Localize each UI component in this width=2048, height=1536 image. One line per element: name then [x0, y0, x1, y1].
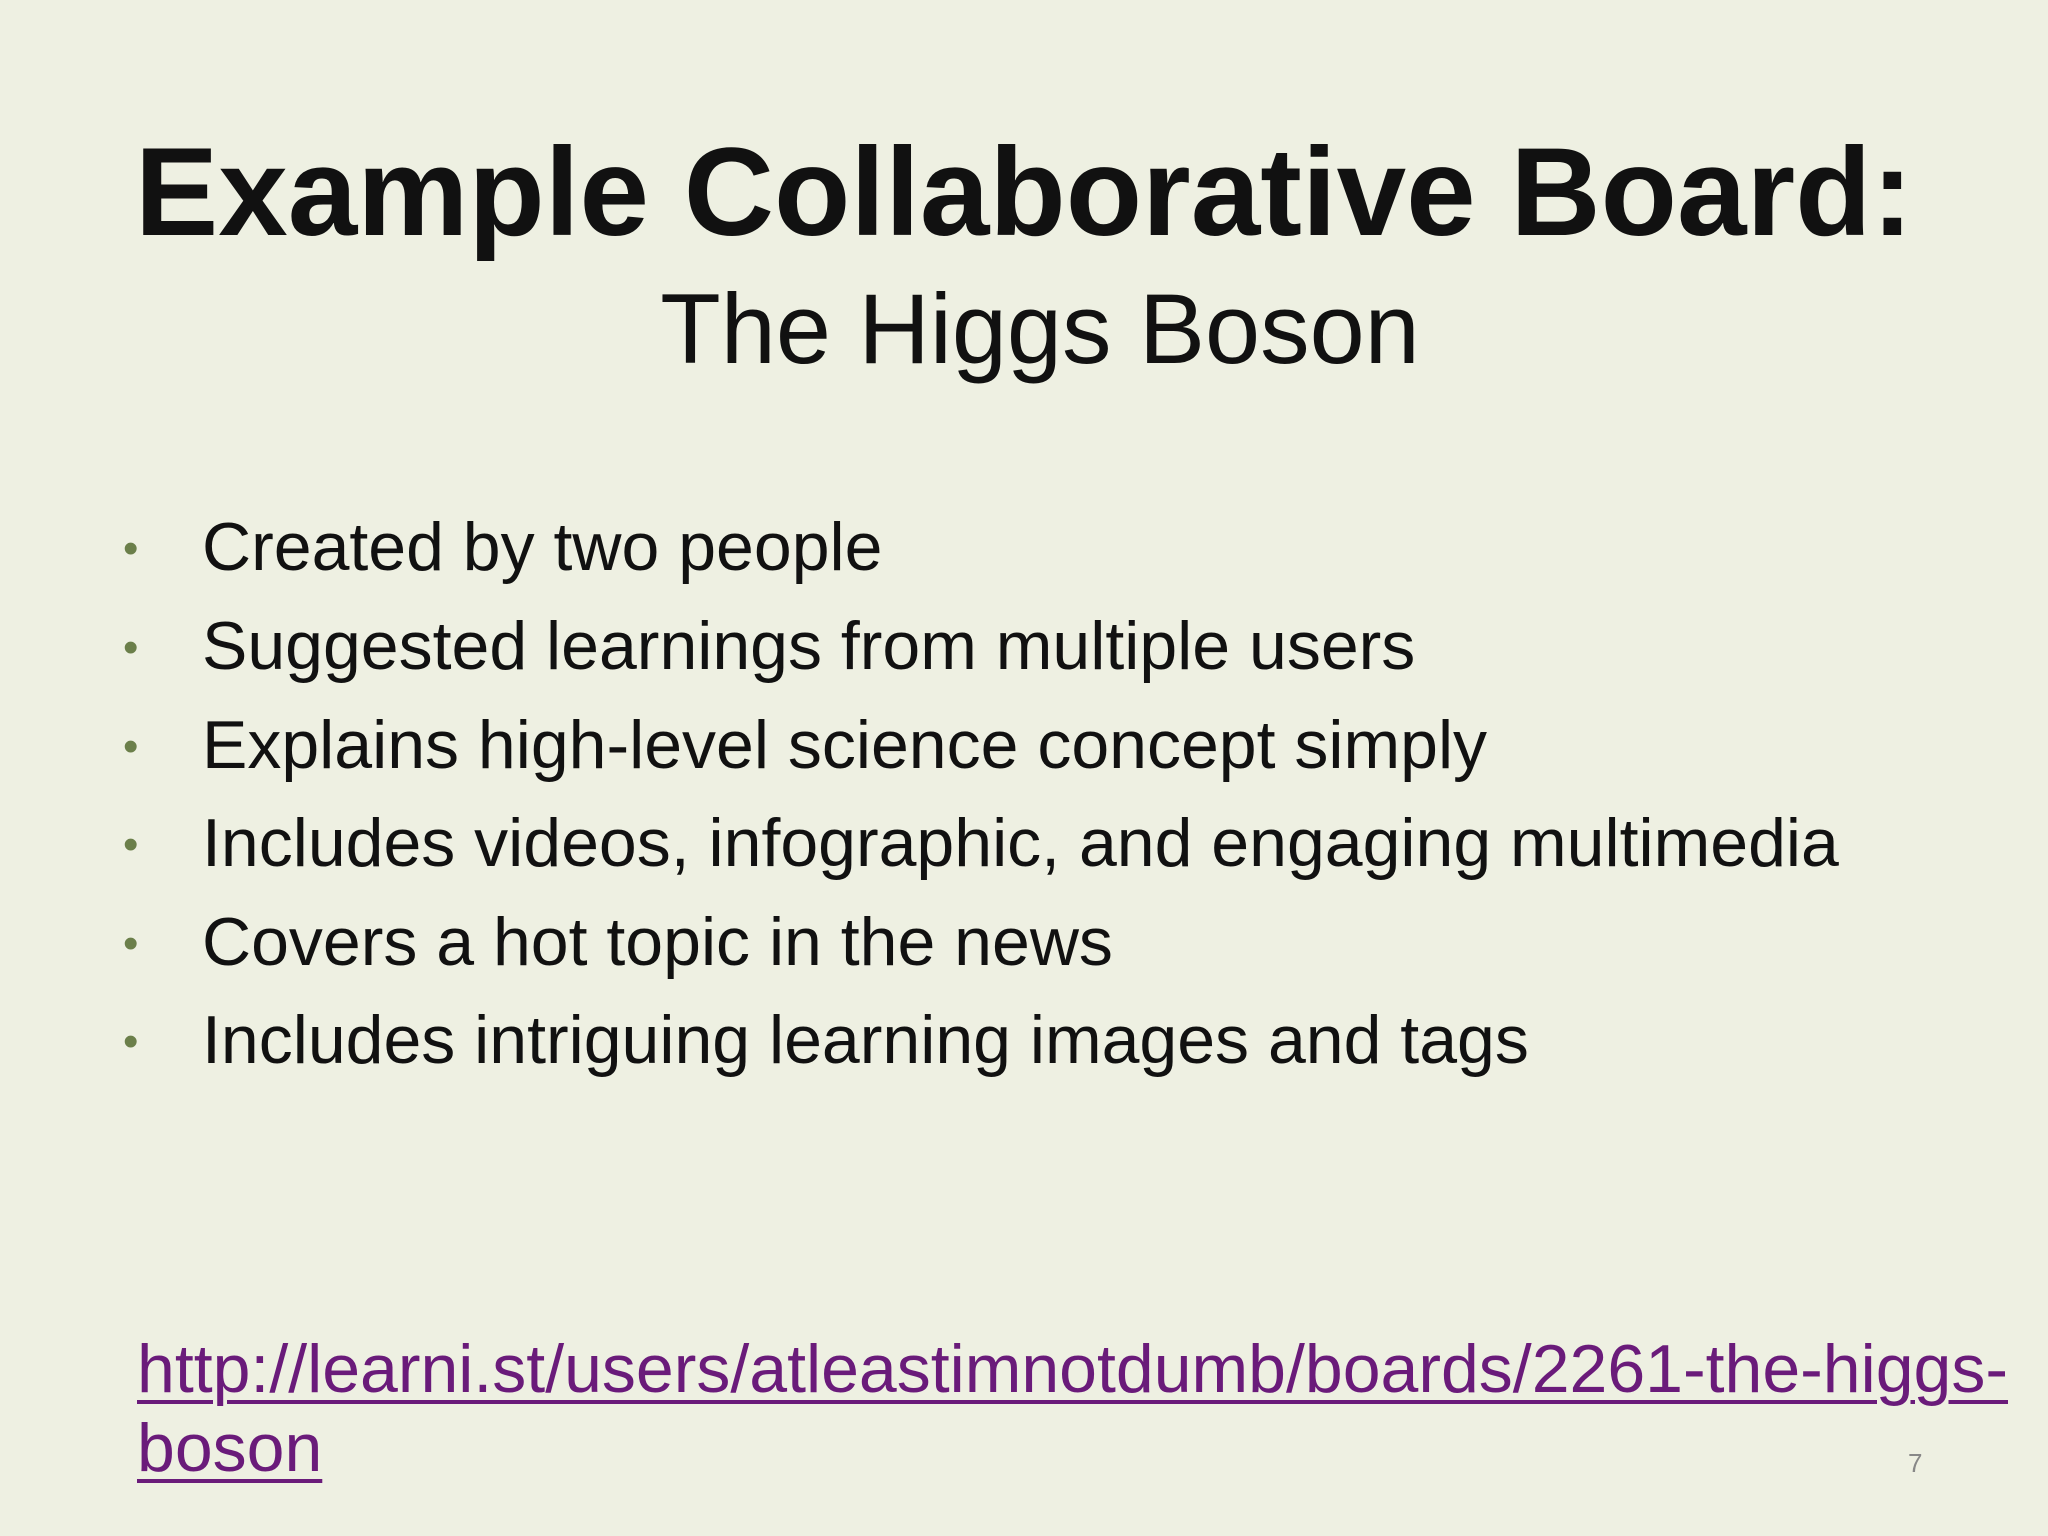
bullet list: •: [123, 1017, 138, 1066]
bullet 1: Created by two people: [202, 509, 882, 585]
page number: 7: [1908, 1448, 1922, 1478]
subtitle: The Higgs Boson: [660, 273, 1420, 384]
bullet list: •: [123, 524, 138, 573]
bullet 5: Covers a hot topic in the news: [202, 904, 1113, 980]
link: http://learni.st/users/atleastimnotdumb/boards/2261-the-higgs-: [137, 1331, 2008, 1407]
title: Example Collaborative Board:: [135, 123, 1913, 262]
link: [137, 1331, 2008, 1486]
bullet 4: Includes videos, infographic, and engaging multimedia: [202, 805, 1839, 881]
bullet 2: Suggested learnings from multiple users: [202, 608, 1415, 684]
bullet 3: Explains high-level science concept simply: [202, 707, 1487, 783]
bullet list: •: [123, 919, 138, 968]
bullet list: •: [123, 820, 138, 869]
bullet list: [123, 509, 1839, 1078]
link: boson: [137, 1410, 322, 1486]
bullet list: •: [123, 722, 138, 771]
bullet list: •: [123, 623, 138, 672]
bullet 6: Includes intriguing learning images and tags: [202, 1002, 1529, 1078]
